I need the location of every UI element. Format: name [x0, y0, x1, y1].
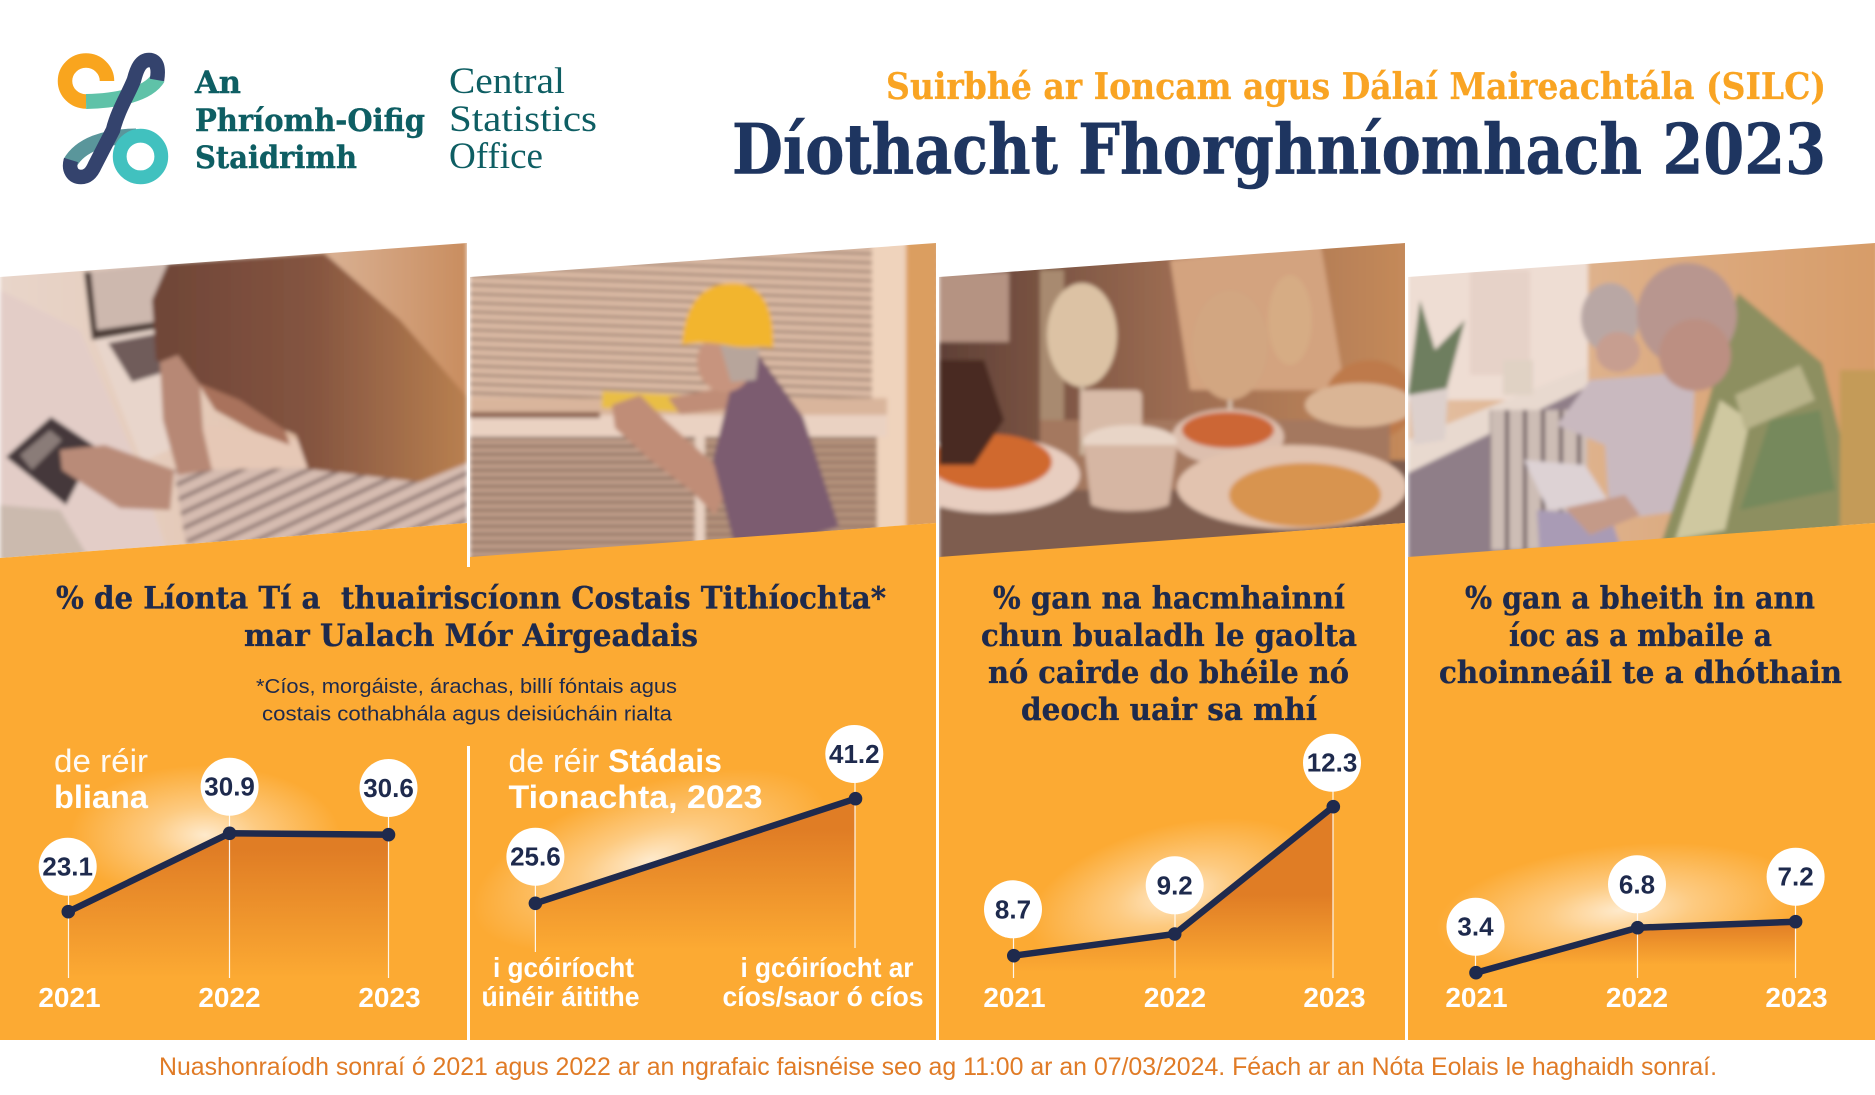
footer note: Nuashonraíodh sonraí ó 2021 agus 2022 ar an ngrafaic faisnéise seo ag 11:00 ar an 07/03/2024. Féach ar an Nóta Eolais le haghaidh sonraí. [159, 1053, 1717, 1081]
logo text: Irish: An [194, 65, 241, 101]
logo text: Irish [194, 65, 425, 176]
bubble: 2023 value: 7.2 [1778, 862, 1814, 892]
heading: meeting friends: nó cairde do bhéile nó [988, 655, 1349, 691]
photo: older couple at radiator [1408, 230, 1875, 570]
bubble: 2022 value: 6.8 [1619, 869, 1655, 899]
chart: keeping home warm by year [1429, 826, 1828, 1013]
heading: keeping home warm: íoc as a mbaile a [1509, 618, 1772, 654]
logo text: Irish: Staidrimh [195, 140, 357, 176]
axis labels [38, 982, 421, 1013]
axis labels [983, 982, 1366, 1013]
heading: meeting friends: chun bualadh le gaolta [981, 618, 1357, 654]
chart subtitle: by year [54, 743, 148, 815]
axis label: owner occupied: úinéir áitithe [482, 981, 640, 1012]
panel: housing costs (orange background) [0, 523, 936, 1040]
bubble: 2022 value [201, 758, 259, 816]
panel: meeting friends (orange background) [939, 523, 1405, 1040]
bubble: owner occupied value: 25.6 [510, 842, 561, 872]
chart: by year, housing burden [38, 758, 421, 1013]
photo: worker with hard hat [470, 230, 940, 570]
axis labels: 2023 [1765, 982, 1828, 1013]
axis label: owner occupied: i gcóiríocht [493, 952, 634, 983]
axis labels: 2022 [1606, 982, 1668, 1013]
bubble: rented value: 41.2 [829, 739, 880, 769]
bubble: 2022 value: 30.9 [204, 772, 255, 802]
heading: keeping home warm: % gan a bheith in ann [1465, 580, 1815, 616]
logo text: English: Office [449, 136, 543, 177]
heading: meeting friends [981, 580, 1357, 728]
footnote: housing costs definition [256, 676, 677, 726]
logo text: English [449, 61, 597, 177]
bubble: rented value [825, 725, 883, 783]
axis label: rented or rent free [722, 952, 924, 1012]
bubble: 2022 value [1608, 855, 1666, 913]
axis labels: 2021 [38, 982, 101, 1013]
heading: keeping home warm: choinneáil te a dhóthain [1439, 655, 1842, 691]
footnote: housing costs definition: costais cothabhála agus deisiúcháin rialta [262, 704, 673, 726]
bubble: 2022 value: 9.2 [1157, 870, 1193, 900]
chart subtitle: by year: bliana [54, 779, 148, 815]
axis label: rented or rent free: i gcóiríocht ar [740, 952, 914, 983]
panel: keeping home warm (orange background) [1408, 523, 1875, 1040]
axis labels: 2022 [198, 982, 261, 1013]
axis labels: 2023 [358, 982, 421, 1013]
bubble: 2021 value: 8.7 [995, 894, 1031, 924]
divider [467, 746, 470, 1040]
logo text: English: Central [449, 61, 565, 102]
axis labels: 2023 [1303, 982, 1366, 1013]
bubble: owner occupied value [506, 828, 564, 886]
footnote: housing costs definition: *Cíos, morgáiste, árachas, billí fóntais agus [256, 676, 677, 698]
heading: housing costs: % de Líonta Tí a thuairiscíonn Costais Tithíochta* [56, 580, 886, 616]
bubble: 2023 value: 30.6 [363, 773, 414, 803]
logo text: Irish: Phríomh-Oifig [195, 103, 425, 139]
logo mark [65, 60, 161, 177]
chart subtitle: by tenure: de réir Stádais [508, 743, 722, 779]
heading: meeting friends: % gan na hacmhainní [993, 580, 1345, 616]
bubble: 2023 value [360, 759, 418, 817]
bubble: 2021 value: 23.1 [42, 852, 93, 882]
axis labels: 2021 [1445, 982, 1508, 1013]
bubble: 2021 value [1446, 898, 1504, 956]
chart subtitle: by tenure [508, 743, 762, 815]
bubble: 2023 value: 12.3 [1307, 748, 1357, 778]
bubble: 2022 value [1146, 856, 1204, 914]
bubble: 2023 value [1303, 734, 1361, 792]
heading: keeping home warm [1439, 580, 1842, 691]
axis label: rented or rent free: cíos/saor ó cíos [722, 981, 924, 1012]
chart subtitle: by year: de réir [54, 743, 148, 779]
heading: meeting friends: deoch uair sa mhí [1021, 692, 1317, 728]
axis labels [1445, 982, 1828, 1013]
bubble: 2023 value [1767, 848, 1825, 906]
axis labels: 2021 [983, 982, 1046, 1013]
heading: housing costs [56, 580, 886, 654]
bubble: 2021 value: 3.4 [1457, 912, 1494, 942]
bubble: 2021 value [984, 880, 1042, 938]
chart subtitle: by tenure: Tionachta, 2023 [508, 779, 762, 815]
photo: restaurant meal [939, 243, 1405, 557]
axis labels: 2022 [1144, 982, 1206, 1013]
photo: woman with calculator [0, 230, 467, 570]
logo text: English: Statistics [449, 99, 597, 140]
axis label: owner occupied [482, 952, 640, 1012]
bubble: 2021 value [39, 838, 97, 896]
chart: meeting friends by year [983, 734, 1366, 1013]
heading: housing costs: mar Ualach Mór Airgeadais [244, 618, 698, 654]
header: logo [65, 60, 597, 177]
chart: by tenure status [451, 725, 924, 1012]
